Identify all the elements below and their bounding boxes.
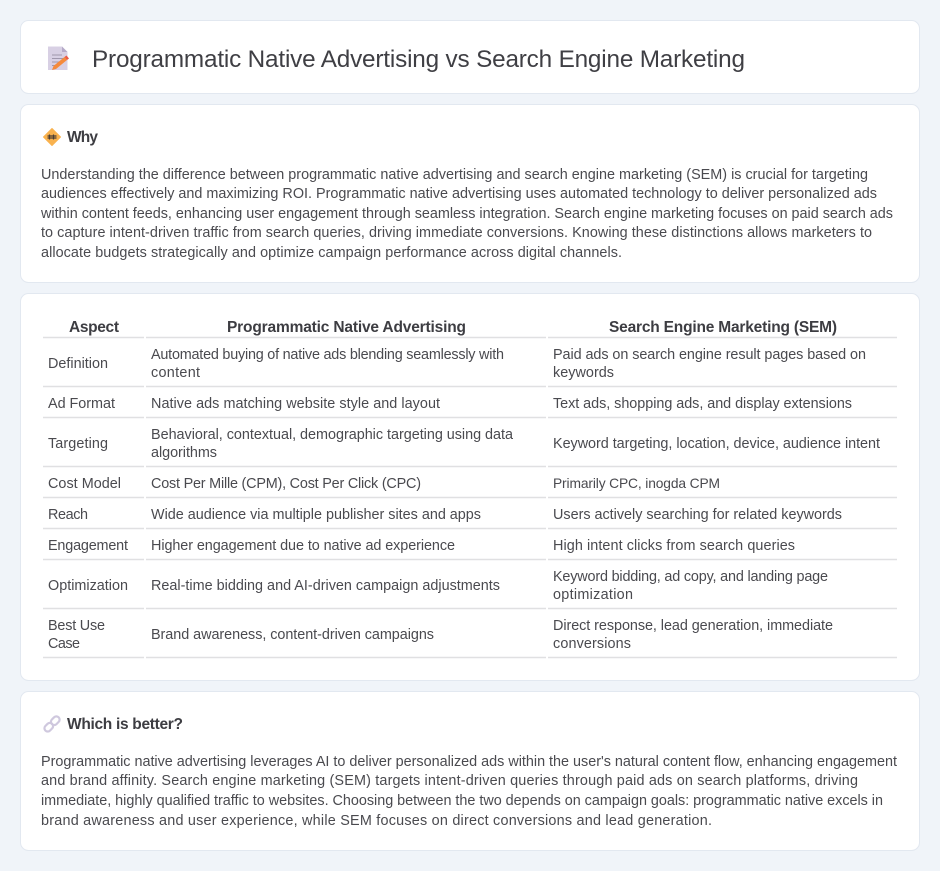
heading: which is better: Which is better?: [67, 716, 183, 733]
row: definition: content: [151, 365, 200, 381]
row: reach: Reach: [48, 507, 88, 523]
table header: Programmatic Native Advertising: [227, 319, 466, 336]
row: best use case: conversions: [553, 636, 631, 652]
row: best use case: Brand awareness, content-driven campaigns: [151, 627, 434, 643]
row: ad format: Text ads, shopping ads, and display extensions: [553, 396, 852, 412]
row: reach: Users actively searching for related keywords: [553, 507, 842, 523]
row: engagement: Engagement: [48, 538, 128, 554]
row: engagement: [43, 538, 897, 560]
panel: why: [20, 104, 920, 282]
row: best use case: Case: [48, 636, 80, 652]
text block: why paragraph: within content feeds, enhancing user engagement through seamless integration. Search engine marketing focuses on paid search ads: [40, 206, 893, 222]
text block: why paragraph: allocate budgets strategically and optimize campaign performance across digital channels.: [41, 245, 622, 261]
text block: which is better paragraph: brand awareness and user experience, while SEM focuses on direct conversions and lead generation.: [41, 813, 712, 829]
row: engagement: Higher engagement due to native ad experience: [151, 538, 455, 554]
row: definition: Paid ads on search engine result pages based on: [553, 347, 866, 363]
text block: which is better paragraph: immediate, highly qualified traffic to websites. Choosing between the two depends on campaign goals: programmatic native excels in: [41, 793, 883, 809]
row: targeting: algorithms: [151, 445, 217, 461]
row: best use case: [43, 618, 897, 658]
panel: title: [20, 20, 920, 94]
panel: which is better: [20, 692, 920, 850]
table header: [43, 319, 897, 338]
text block: why paragraph: to capture intent-driven traffic from search queries, driving immediate conversions. Knowing these distinctions allows marketers to: [41, 225, 872, 241]
row: optimization: Real-time bidding and AI-driven campaign adjustments: [151, 578, 500, 594]
row: definition: Definition: [48, 356, 108, 372]
row: engagement: High intent clicks from search queries: [553, 538, 795, 554]
text block: why paragraph: Understanding the difference between programmatic native advertising and search engine marketing (SEM) is crucial for targeting: [41, 167, 868, 183]
row: reach: [43, 507, 897, 528]
row: optimization: [43, 569, 897, 608]
panel: comparison table: [20, 294, 920, 680]
row: reach: Wide audience via multiple publisher sites and apps: [151, 507, 481, 523]
row: optimization: Keyword bidding, ad copy, and landing page: [553, 569, 828, 585]
row: targeting: [43, 427, 897, 466]
text block: which is better paragraph: [41, 754, 897, 829]
table header: Search Engine Marketing (SEM): [609, 319, 837, 336]
heading: why: Why: [67, 129, 98, 146]
row: optimization: optimization: [553, 587, 633, 603]
icon: warning diamond: [44, 128, 60, 146]
text block: which is better paragraph: and brand affinity. Search engine marketing (SEM) targets intent-driven queries through paid ads on search platforms, driving: [41, 773, 858, 789]
heading: page title: Programmatic Native Advertising vs Search Engine Marketing: [92, 46, 745, 73]
icon: link: [43, 715, 61, 733]
row: targeting: Behavioral, contextual, demographic targeting using data: [151, 427, 513, 443]
row: targeting: Targeting: [48, 436, 108, 452]
row: cost model: Primarily CPC, inogda CPM: [553, 476, 720, 491]
text block: which is better paragraph: Programmatic native advertising leverages AI to deliver personalized ads within the user's natural content flow, enhancing engagement: [41, 754, 897, 770]
row: definition: [43, 347, 897, 386]
row: targeting: Keyword targeting, location, device, audience intent: [553, 436, 880, 452]
row: cost model: Cost Model: [48, 476, 121, 492]
icon: document with pencil: [48, 46, 69, 70]
row: cost model: [43, 476, 897, 498]
row: best use case: Direct response, lead generation, immediate: [553, 618, 833, 634]
row: best use case: Best Use: [48, 618, 105, 634]
text block: why paragraph: audiences effectively and maximizing ROI. Programmatic native advertising uses automated technology to deliver personalized ads: [41, 186, 877, 202]
table header: Aspect: [69, 319, 119, 336]
row: optimization: Optimization: [48, 578, 128, 594]
row: cost model: Cost Per Mille (CPM), Cost Per Click (CPC): [151, 476, 421, 492]
row: ad format: [43, 396, 897, 418]
text block: why paragraph: [40, 167, 893, 261]
row: ad format: Native ads matching website style and layout: [151, 396, 440, 412]
row: definition: keywords: [553, 365, 614, 381]
row: ad format: Ad Format: [48, 396, 115, 412]
row: definition: Automated buying of native ads blending seamlessly with: [151, 347, 504, 363]
